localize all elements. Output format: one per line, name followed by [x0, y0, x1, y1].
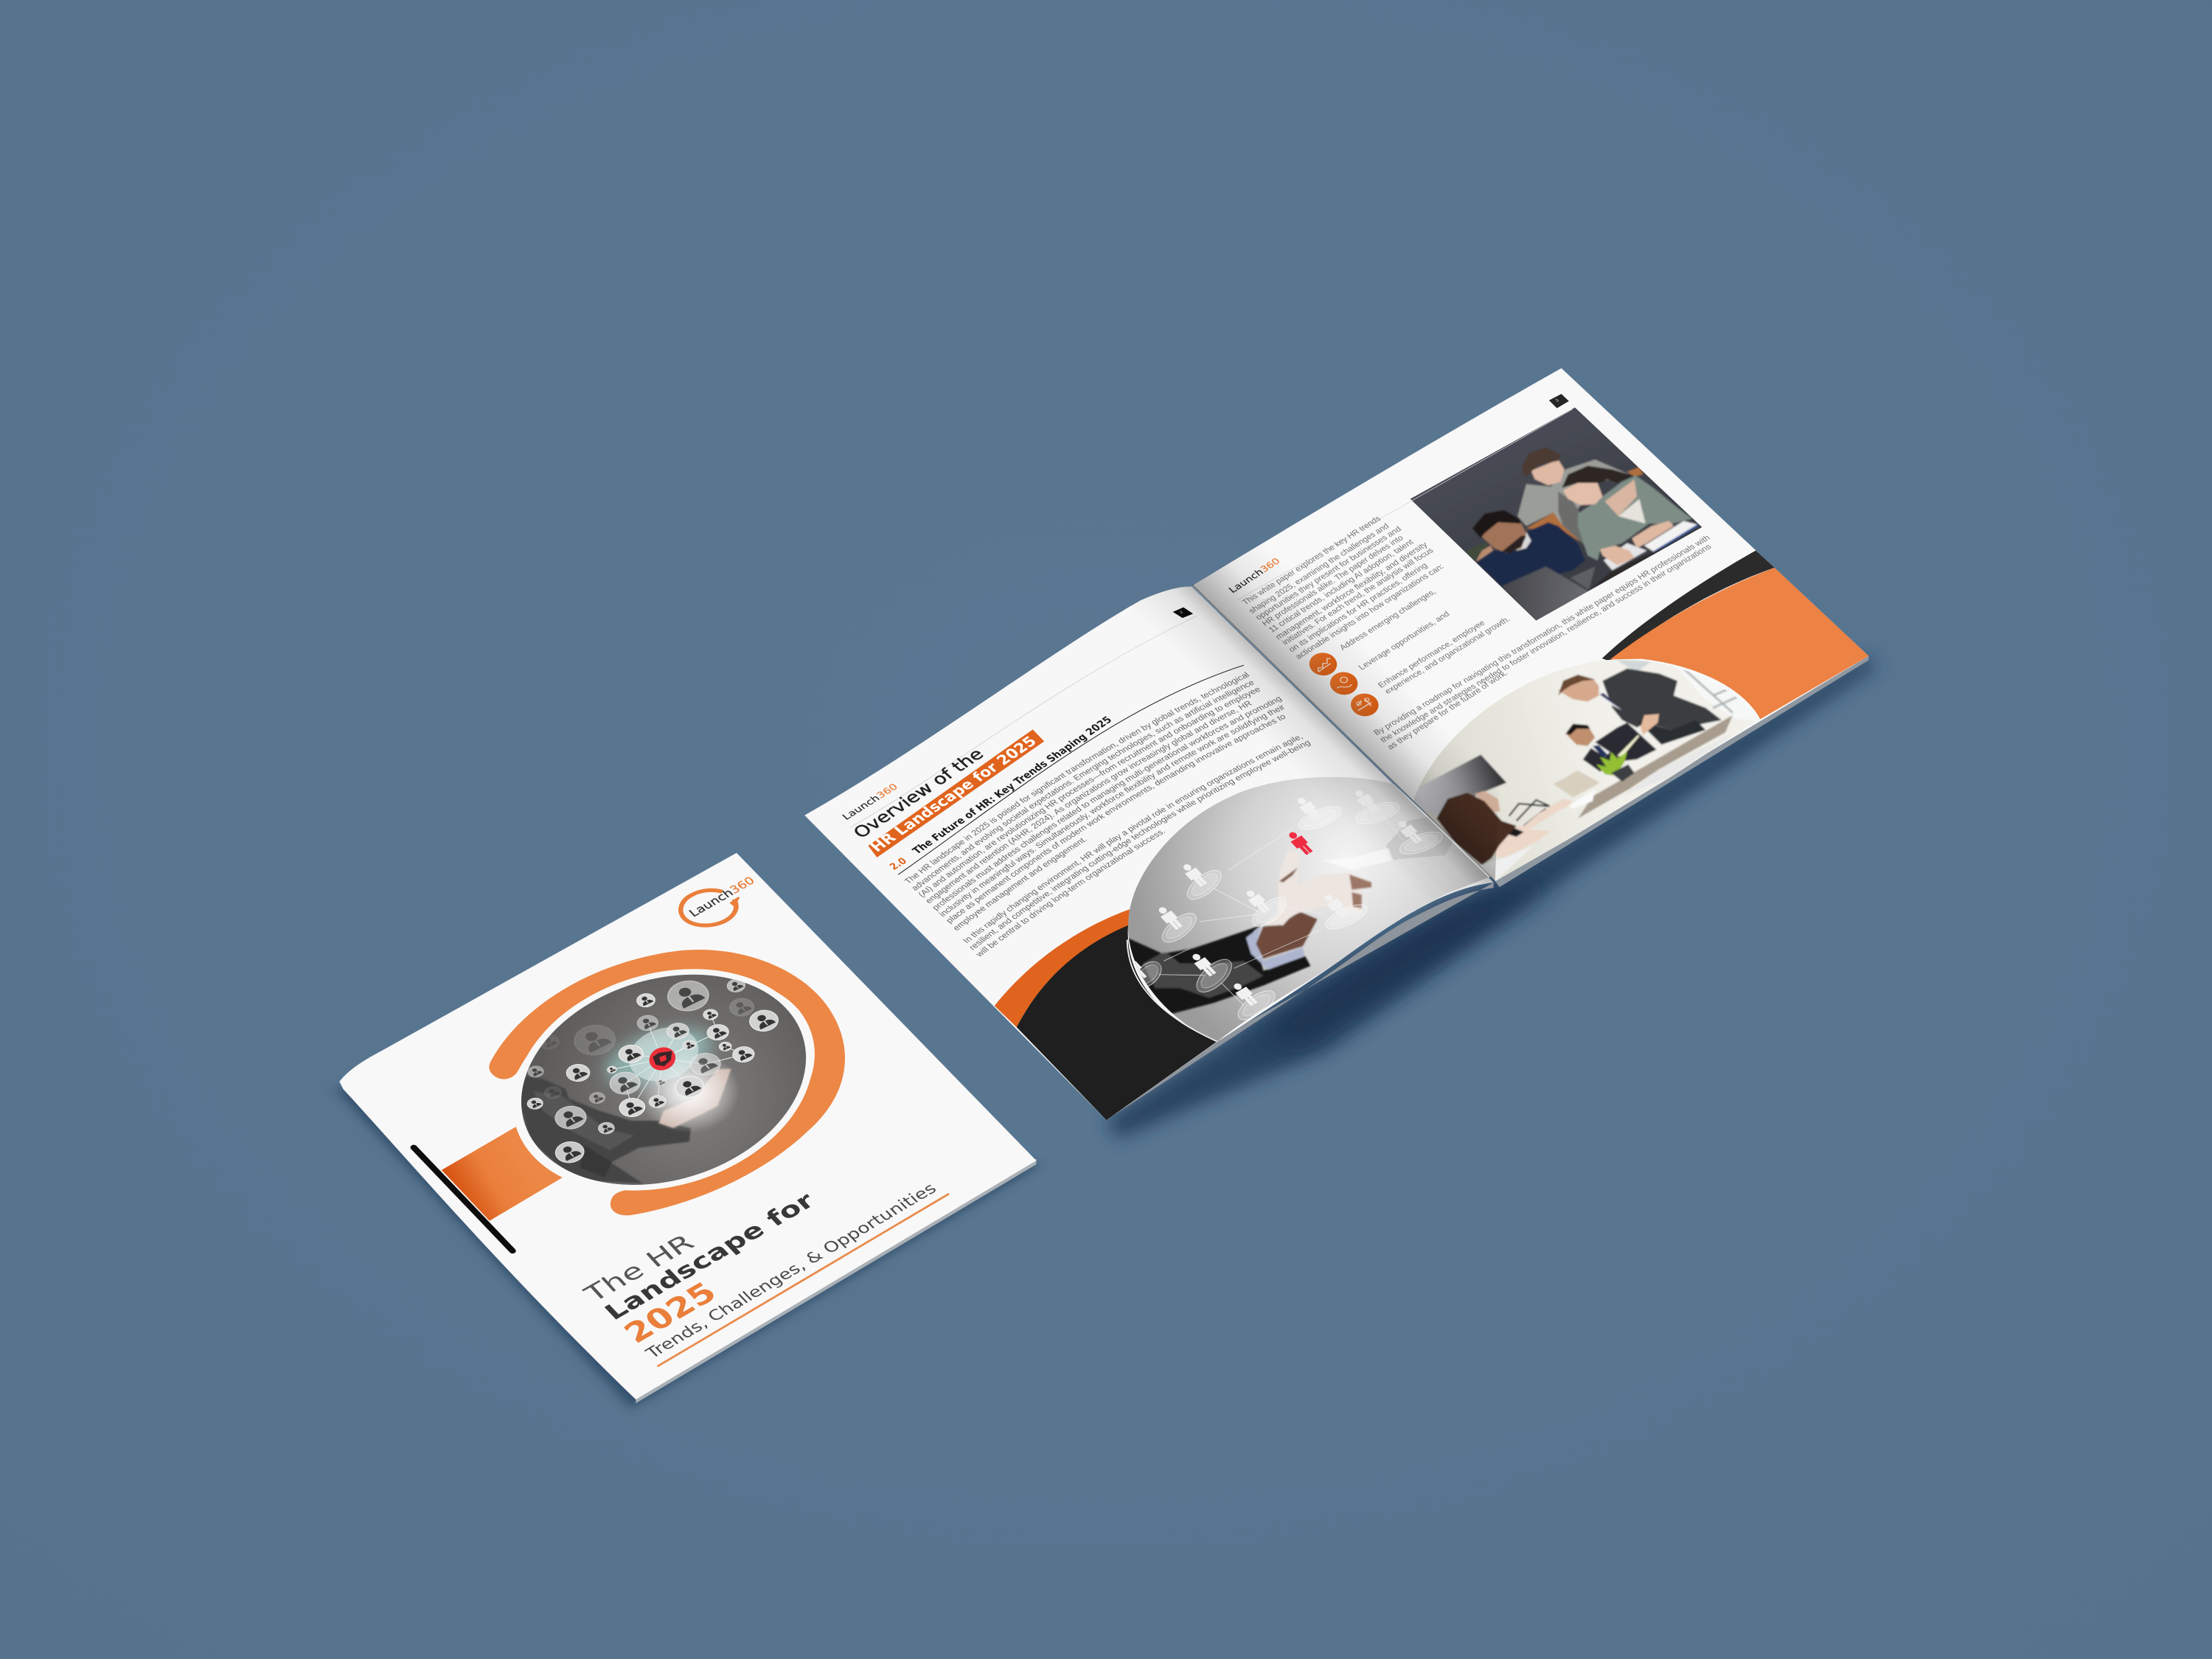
page sheet	[804, 586, 1494, 1120]
left page logo: Launch360	[841, 782, 900, 822]
section heading: The Future of HR: Key Trends Shaping 2025	[911, 714, 1115, 857]
header rule	[1237, 409, 1573, 600]
network lines	[1159, 817, 1403, 1005]
section rule	[898, 665, 1244, 874]
photo ring	[489, 950, 845, 1215]
page number box	[1549, 394, 1569, 408]
black corner shape	[1017, 925, 1217, 1120]
red shield lock	[649, 1047, 675, 1071]
table	[1578, 715, 1733, 818]
intro text: 11 critical trends, including AI adoption, talent	[1267, 538, 1416, 634]
right page logo: Launch360	[1226, 556, 1282, 595]
right page text	[1192, 394, 1714, 881]
cover booklet	[334, 853, 1041, 1408]
bullet 3: experience, and organizational growth.	[1383, 616, 1512, 696]
open brochure: right page	[1192, 368, 1868, 887]
page number box: 2	[1179, 611, 1184, 615]
spine shading	[804, 586, 1494, 1120]
body text: place as permanent components of modern work environments, demanding innovative approaches to	[947, 715, 1286, 925]
header rule	[851, 616, 1196, 827]
papers	[1604, 543, 1646, 570]
top team photo	[1406, 403, 1711, 625]
cover title	[578, 1180, 941, 1363]
page thickness	[1495, 656, 1868, 887]
intro text: HR professionals alike. The paper delves into	[1261, 534, 1405, 627]
page number box: 3	[1555, 398, 1560, 403]
cover sheet and ring	[334, 853, 1041, 1408]
body text: In this rapidly changing environment, HR will play a pivotal role in ensuring organizations remain agile,	[963, 736, 1304, 944]
laptop	[1554, 771, 1600, 798]
network lines	[616, 1020, 734, 1099]
hand	[658, 1068, 731, 1128]
hands	[1600, 521, 1674, 566]
intro text: on its implications for HR practices, offering	[1287, 562, 1430, 654]
red person	[1285, 830, 1315, 856]
people pictograms	[1119, 788, 1425, 1007]
cover spine details and title	[414, 874, 949, 1366]
icon: idea hand	[1325, 668, 1363, 699]
left sheet	[804, 586, 1494, 1120]
orange band	[442, 1127, 563, 1221]
orange arc	[995, 909, 1130, 1027]
world map	[1386, 816, 1455, 860]
spread shadow	[1107, 656, 1877, 1139]
network glow	[599, 1021, 718, 1093]
orange panel	[1610, 568, 1868, 719]
heading: Overview of the	[849, 745, 988, 842]
title underline	[658, 1194, 949, 1366]
bullet 2: Leverage opportunities, and	[1357, 610, 1451, 672]
cover title: The HR	[578, 1229, 700, 1307]
cover title: Landscape for	[599, 1188, 821, 1325]
closing text: the knowledge and strategies needed to foster innovation, resilience, and success in their organizations	[1379, 543, 1714, 745]
meeting photo	[1401, 649, 1770, 885]
intro text: initiatives. For each trend, the analysis will focus	[1281, 546, 1436, 647]
body text: engagement and retention (AIHR, 2024). As organizations grow increasingly global and diverse, HR	[926, 700, 1252, 903]
icon: growth stairs	[1304, 649, 1342, 680]
closing text: By providing a roadmap for navigating this transformation, this white paper equips HR professionals with	[1372, 534, 1712, 737]
people icons	[524, 975, 783, 1166]
window	[1617, 660, 1652, 672]
right sheet	[1192, 368, 1868, 887]
hand	[1256, 912, 1318, 959]
body text: employee management and engagement.	[954, 838, 1087, 931]
cover shadow	[334, 1088, 1041, 1408]
monitor	[1413, 754, 1506, 816]
globe photo	[1119, 767, 1495, 1047]
body text	[902, 671, 1312, 959]
spine line	[1192, 585, 1495, 881]
photo white border	[458, 923, 869, 1237]
body text: resilient, and competitive, integrating cutting-edge technologies while prioritizing employee well-being	[970, 740, 1311, 950]
shirt cuff	[1246, 927, 1304, 970]
intro text: management, workforce flexibility, and diversity	[1274, 540, 1430, 641]
face and hair	[1531, 459, 1565, 485]
intro text: shaping 2025, examining the challenges and	[1248, 522, 1391, 615]
body text: will be central to driving long-term organizational success.	[976, 830, 1165, 957]
dark arc	[1602, 551, 1775, 661]
cover page stack	[636, 1159, 1037, 1403]
bullet 3: Enhance performance, employee	[1377, 619, 1487, 689]
bullet 1: Address emerging challenges,	[1338, 588, 1438, 652]
body text: advancements, and evolving societal expectations. Emerging technologies, such as artificial intelligence	[913, 681, 1254, 891]
table	[1536, 527, 1702, 621]
spread deep shadow	[1253, 885, 1556, 1047]
highlighted heading: HR Landscape for 2025	[866, 733, 1040, 855]
grey jacket colleague	[1517, 459, 1632, 544]
intro text: actionable insights into how organizations can:	[1294, 563, 1446, 661]
body text: inclusivity in meaningful ways. Simultaneously, workforce flexibility and remote work are solidifying their	[938, 705, 1284, 917]
body text: professionals must address challenges related to managing multi-generational workforces and promoting	[933, 696, 1282, 911]
section number: 2.0	[888, 856, 910, 872]
icon: team	[1346, 689, 1383, 720]
laptops	[1571, 566, 1595, 590]
page thickness	[1107, 883, 1494, 1120]
seated woman	[1484, 799, 1573, 858]
spine shading	[1192, 498, 1504, 881]
plant	[1596, 752, 1627, 776]
suit sleeve	[1127, 850, 1371, 1015]
intro text: This white paper explores the key HR trends	[1241, 515, 1382, 607]
sleeve	[518, 1077, 691, 1183]
left page content	[804, 586, 1494, 1120]
cover title: Trends, Challenges, & Opportunities	[641, 1180, 941, 1363]
logo: Launch360: Launch360	[686, 874, 757, 919]
circle outline	[1127, 939, 1217, 1042]
document	[1617, 735, 1639, 757]
seated man	[1583, 723, 1657, 772]
standing man	[1602, 669, 1722, 730]
cardigan colleague	[1578, 476, 1692, 560]
body text: The HR landscape in 2025 is poised for significant transformation, driven by global trends, technological	[904, 672, 1249, 883]
second woman	[1475, 791, 1500, 813]
intro text: opportunities they present for businesses and	[1254, 525, 1403, 622]
desk background	[1526, 467, 1643, 542]
rings	[1130, 798, 1445, 1025]
desk tray	[1509, 800, 1550, 826]
cover title: 2025	[617, 1276, 723, 1349]
intro text	[1241, 515, 1446, 661]
page sheet	[1192, 368, 1868, 881]
navy sweater colleague	[1477, 522, 1585, 586]
open brochure: left page	[804, 587, 1494, 1121]
body text: (AI) and automation, are revolutionizing HR processes—from recruitment and onboarding to employee	[919, 688, 1260, 897]
circular network photo	[521, 975, 807, 1185]
cover page	[339, 853, 1037, 1399]
closing text: as they prepare for the future of work.	[1385, 669, 1510, 751]
black binding strip	[414, 1147, 512, 1251]
page number box	[1173, 608, 1193, 618]
